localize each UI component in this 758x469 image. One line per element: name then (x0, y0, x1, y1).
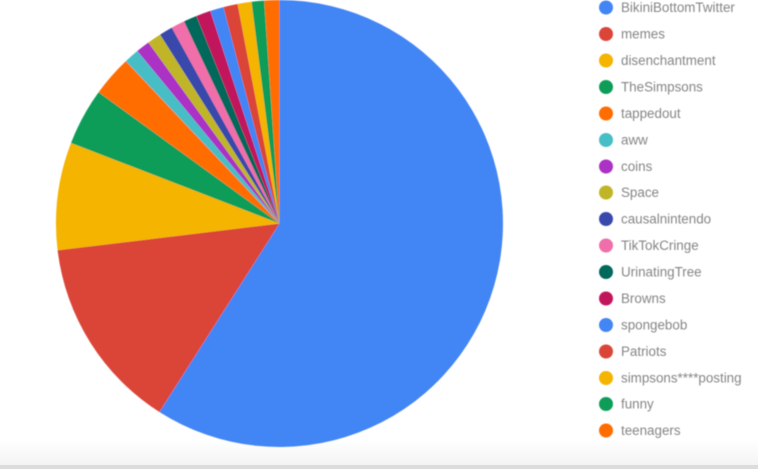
legend item: TikTokCringe: TikTokCringe (621, 238, 699, 253)
slice: coins (137, 42, 280, 224)
legend item: coins: coins (621, 159, 653, 174)
legend (599, 0, 742, 438)
legend item: simpsons****posting: simpsons****posting (621, 370, 742, 386)
legend item: funny: funny (621, 396, 654, 412)
legend item: coins (599, 159, 653, 174)
slice: tappedout (99, 61, 280, 223)
legend item: memes (599, 26, 665, 42)
slice: teenagers (264, 0, 280, 224)
slice: UrinatingTree (184, 16, 280, 224)
slice: funny (252, 0, 280, 224)
slice: causalnintendo (160, 28, 280, 223)
legend item: BikiniBottomTwitter: BikiniBottomTwitter (621, 0, 735, 15)
legend item: Browns (599, 291, 666, 306)
slice: Browns (196, 11, 280, 224)
pie chart (56, 0, 503, 447)
legend item: funny (599, 396, 654, 412)
legend item: aww (599, 132, 648, 148)
legend item: Patriots (599, 344, 667, 359)
legend item: Browns: Browns (621, 291, 666, 306)
legend item: teenagers: teenagers (621, 423, 681, 438)
legend item: TheSimpsons: TheSimpsons (621, 80, 703, 94)
bottom edge band (0, 440, 758, 469)
legend item: tappedout: tappedout (621, 106, 681, 121)
legend item: causalnintendo: causalnintendo (621, 212, 711, 226)
legend item: Patriots: Patriots (621, 344, 667, 359)
legend item: spongebob: spongebob (621, 318, 687, 332)
slice: disenchantment (56, 143, 280, 250)
slice: TikTokCringe (172, 21, 280, 224)
slice: simpsons****posting (238, 2, 280, 223)
legend item: aww: aww (621, 132, 648, 148)
legend item: UrinatingTree: UrinatingTree (621, 264, 702, 280)
slice: memes (58, 224, 279, 412)
slice: spongebob (210, 7, 280, 223)
legend item: memes: memes (621, 26, 665, 42)
legend item: Space: Space (621, 185, 659, 200)
slice: Space (148, 35, 280, 223)
slice: TheSimpsons (71, 92, 280, 223)
slice: BikiniBottomTwitter (159, 0, 503, 447)
legend item: Space (599, 185, 659, 200)
slice: Patriots (224, 4, 280, 224)
legend item: disenchantment: disenchantment (621, 53, 716, 68)
slice: aww (126, 51, 280, 224)
